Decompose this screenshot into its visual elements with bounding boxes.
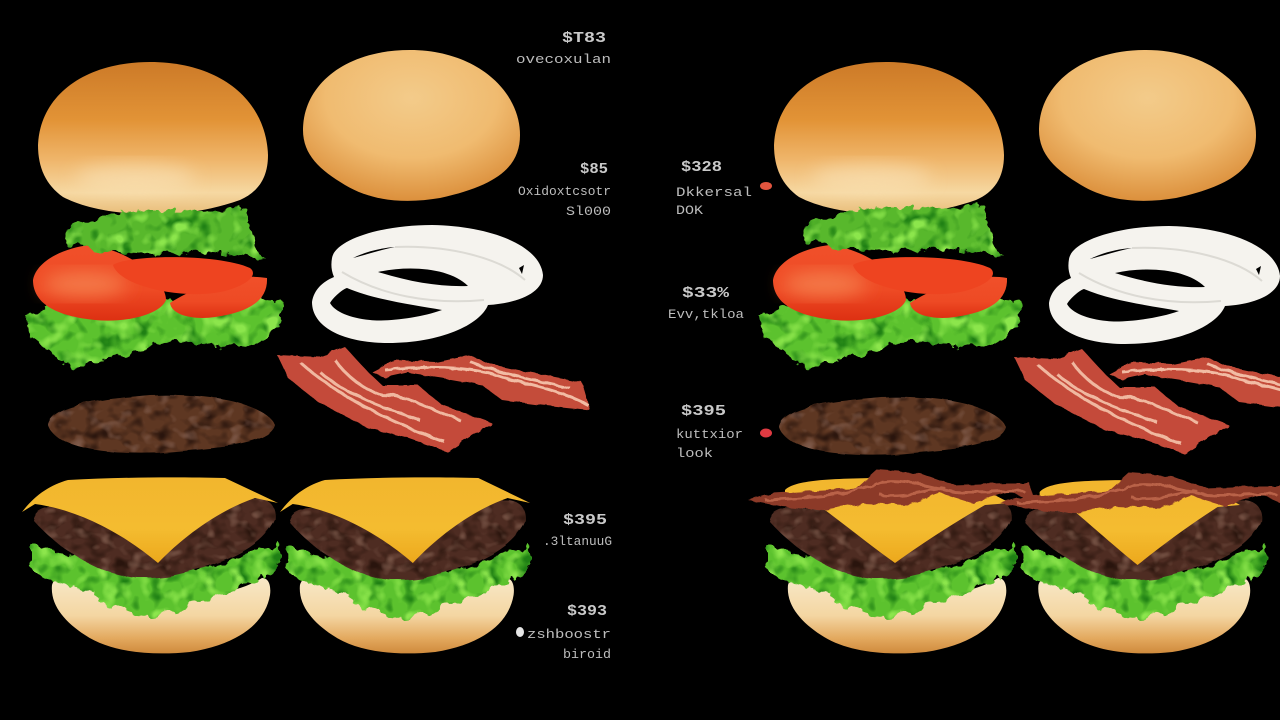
icon: red dot marker [760,182,772,190]
text block: price and label three: $328 [681,159,722,176]
icon: red dot marker two [760,428,772,438]
text block: price and label seven: zshboostr [527,627,611,642]
panel: right ingredients [748,50,1280,653]
icon: beef patty, right [779,397,1006,455]
icon: onion rings [312,225,543,343]
text block: price and label four [668,285,744,322]
text block: price and label three: DOK [676,203,703,218]
icon: cheeseburger base two [280,477,531,653]
icon: top bun with crown, right [774,62,1004,214]
text block: price and label three: Dkkersal [676,185,752,200]
icon: plain bun, right [1039,50,1256,201]
icon: bacon strips, right [1014,349,1280,454]
icon: cheeseburger base one [22,477,281,653]
icon: top bun with crown [38,62,268,214]
text block: price and label seven: $393 [567,603,607,620]
text block: price and label four: $33% [682,285,730,302]
text block: price and label six: $395 [563,512,607,529]
icon: lettuce and tomato [26,208,284,365]
text block: price and label four: Evv,tkloa [668,307,744,322]
icon: onion rings, right [1049,226,1280,344]
text block: price and label five: $395 [681,403,726,420]
text block: price and label five [676,403,743,461]
text block: price and label two [518,161,611,219]
text block: price and label one: ovecoxulan [516,52,611,67]
text block: price and label six [543,512,612,549]
panel: left ingredients [22,50,590,653]
text block: price and label five: kuttxior [676,427,743,442]
icon: bacon strips [277,347,590,452]
icon: bacon cheeseburger base two [1000,473,1280,653]
text block: price and label two: Sl000 [566,204,611,219]
text block: price and label seven: biroid [563,647,611,662]
icon: lettuce and tomato, right [760,205,1023,365]
text block: price and label one [516,30,611,67]
icon: white dot marker [516,627,524,637]
text block: price and label three [676,159,752,218]
text block: price and label seven [527,603,611,662]
text block: price and label one: $T83 [562,30,606,47]
text block: price and label two: $85 [580,161,608,178]
text block: price and label five: look [676,446,713,461]
text block: price and label two: Oxidoxtcsotr [518,184,611,199]
icon: beef patty [48,395,275,453]
icon: plain bun [303,50,520,201]
icon: bacon cheeseburger base one [748,470,1033,653]
text block: price and label six: .3ltanuuG [543,534,612,549]
